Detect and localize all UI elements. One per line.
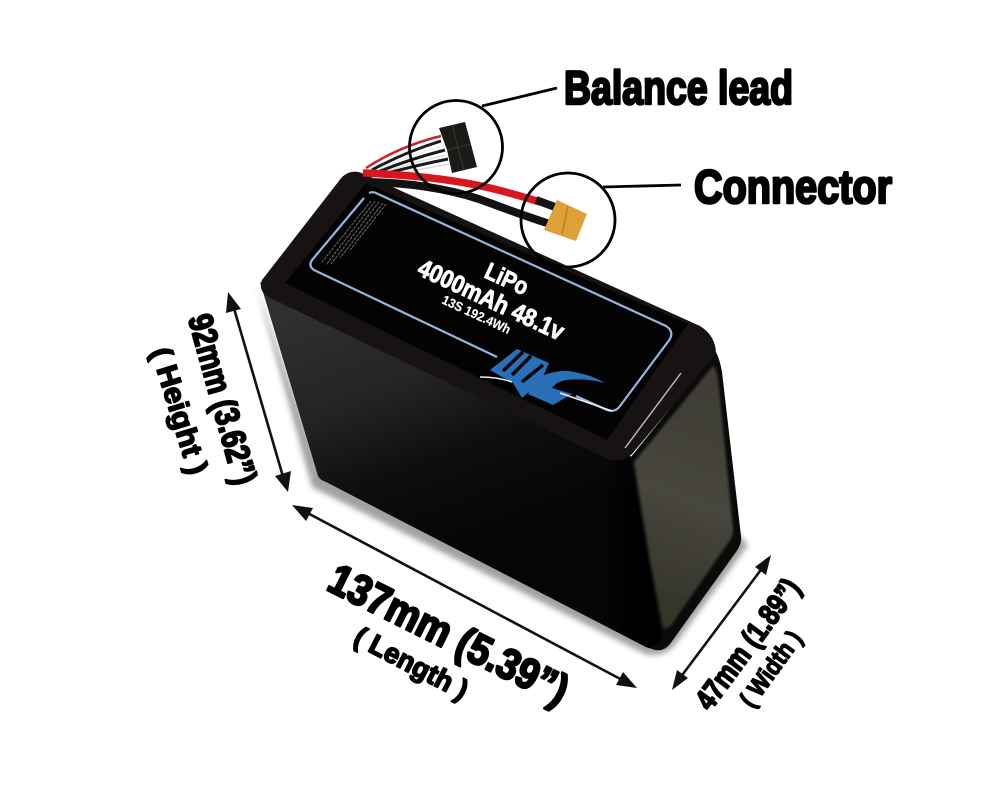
callout circle: connector bbox=[521, 173, 615, 267]
red wire boot bbox=[536, 200, 555, 207]
callout label: connector: Connector bbox=[694, 160, 892, 213]
balance lead wires bbox=[366, 136, 450, 173]
battery front face bbox=[260, 282, 664, 649]
callout label: balance lead: Balance lead bbox=[564, 61, 793, 114]
top face label panel bbox=[285, 183, 688, 440]
battery top face bbox=[261, 172, 716, 460]
capacity and voltage: 4000mAh 48.1v bbox=[413, 254, 569, 346]
width dimension label: 47mm (1.89”) bbox=[689, 573, 807, 716]
callout line: balance lead bbox=[482, 88, 557, 106]
top face highlight bbox=[625, 373, 681, 448]
logo wing bbox=[528, 371, 605, 405]
label border bbox=[310, 192, 671, 411]
length dimension label: 137mm (5.39”) bbox=[321, 555, 576, 715]
battery pack bbox=[256, 172, 748, 655]
callout line: connector bbox=[603, 185, 681, 187]
logo swoosh bbox=[480, 377, 612, 411]
width dimension arrow bbox=[672, 555, 771, 690]
front face shading towards the end bbox=[590, 440, 664, 649]
logo M mark bbox=[490, 349, 549, 398]
battery drop shadow bbox=[256, 285, 748, 655]
height dimension arrow bbox=[226, 292, 291, 492]
connector plug bbox=[544, 200, 587, 241]
main black wire bbox=[370, 182, 550, 224]
main red wire bbox=[363, 173, 540, 202]
callout circle: balance lead bbox=[410, 100, 502, 194]
balance lead plug bbox=[439, 122, 477, 173]
label fine print bbox=[322, 201, 386, 265]
height caption: ( Height ) bbox=[144, 344, 213, 478]
logo stripes bbox=[503, 352, 543, 382]
label text bbox=[413, 254, 569, 346]
length dimension arrow bbox=[292, 505, 637, 688]
battery end face bbox=[630, 352, 741, 650]
height dimension label: 92mm (3.62”) bbox=[180, 310, 264, 489]
width caption: ( Width ) bbox=[734, 626, 808, 713]
logo bbox=[480, 349, 612, 411]
product type: LiPo bbox=[481, 258, 533, 301]
battery end panel bbox=[634, 366, 733, 628]
cell count and energy: 13S 192.4Wh bbox=[440, 292, 513, 337]
length caption: ( Length ) bbox=[349, 621, 474, 706]
